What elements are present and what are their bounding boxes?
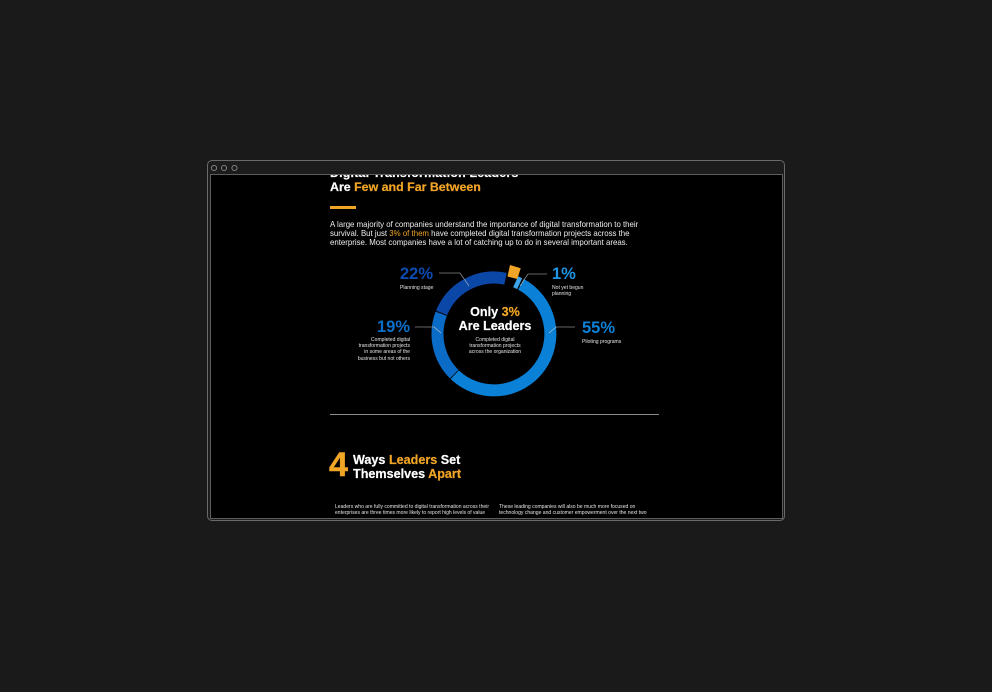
segment: 1% not yet begun <box>516 282 520 284</box>
label: 1% not yet begun planning: 1% <box>552 265 576 283</box>
section heading: ways leaders set themselves apart <box>352 453 461 481</box>
segment: 55% piloting programs <box>455 284 550 390</box>
label: 19% completed in some areas: business but not others <box>358 356 410 362</box>
intro paragraph <box>330 220 638 247</box>
centre caption <box>469 337 521 355</box>
label: 19% completed in some areas: 19% <box>377 318 410 336</box>
centre caption: across the organization <box>469 349 521 355</box>
centre caption: transformation projects <box>469 343 521 349</box>
label: 1% not yet begun planning: Not yet begun <box>552 285 583 291</box>
label: 22% planning stage: 22% <box>400 265 433 283</box>
donut centre text <box>458 305 531 355</box>
section heading: number 4: 4 <box>329 446 348 484</box>
label: 19% completed in some areas: in some areas of the <box>364 349 410 355</box>
divider line <box>330 414 659 415</box>
segment: 22% planning stage <box>442 278 506 313</box>
intro paragraph: A large majority of companies understand the importance of digital transformation to their <box>330 220 638 229</box>
label: 22% planning stage <box>400 265 434 291</box>
intro paragraph: enterprise. Most companies have a lot of catching up to do in several important areas. <box>330 238 628 247</box>
left column text <box>335 504 489 516</box>
section heading: ways leaders set themselves apart: Themselves Apart <box>353 467 461 481</box>
main heading <box>330 174 518 194</box>
centre headline: Are Leaders <box>459 319 531 333</box>
label: 55% piloting programs: 55% <box>582 319 615 337</box>
orange accent rule <box>330 206 356 208</box>
label: 55% piloting programs: Piloting programs <box>582 339 621 345</box>
label: 22% planning stage: Planning stage <box>400 285 433 291</box>
label: 19% completed in some areas: Completed digital <box>371 337 410 343</box>
browser window frame <box>207 160 785 521</box>
leader lines <box>415 273 575 333</box>
centre headline <box>458 305 531 333</box>
label: 19% completed in some areas <box>358 318 410 362</box>
label: 1% not yet begun planning: planning <box>552 291 571 297</box>
intro paragraph: survival. But just 3% of them have completed digital transformation projects across the <box>330 229 630 238</box>
segment: 3% leaders marker <box>508 265 521 279</box>
segment: 19% completed in some areas <box>437 314 454 374</box>
label: 19% completed in some areas: transformation projects <box>359 343 410 349</box>
centre headline: Only 3% <box>470 305 520 319</box>
label: 1% not yet begun planning <box>552 265 584 297</box>
left column text: enterprises are three times more likely to report high levels of value <box>335 510 485 516</box>
page viewport panel <box>210 174 783 519</box>
label: 55% piloting programs <box>582 319 622 345</box>
right column text: These leading companies will also be much more focused on <box>499 504 635 510</box>
section heading: ways leaders set themselves apart: Ways Leaders Set <box>353 453 460 467</box>
right column text: technology change and customer empowerment over the next two <box>499 510 647 516</box>
main heading: Are Few and Far Between <box>330 180 481 194</box>
right column text <box>499 504 647 516</box>
window control dots <box>211 165 238 171</box>
centre caption: Completed digital <box>476 337 514 343</box>
left column text: Leaders who are fully committed to digital transformation across their <box>335 504 489 510</box>
